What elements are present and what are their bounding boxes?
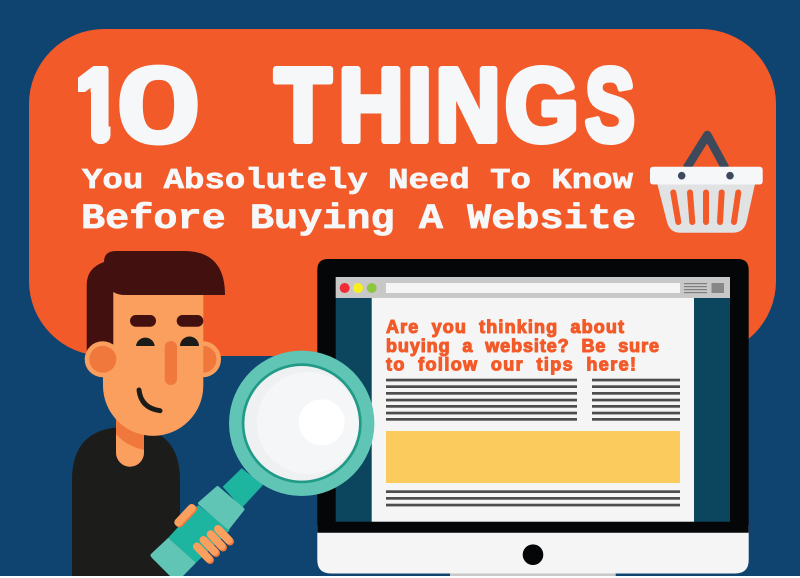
left ear bbox=[85, 341, 121, 377]
title: 10 THINGS: G bbox=[505, 47, 579, 162]
yellow banner bbox=[386, 431, 680, 483]
hand: thumb bbox=[178, 508, 193, 524]
lens ring bbox=[229, 351, 374, 496]
monitor stand base bbox=[450, 570, 616, 576]
nose bbox=[165, 341, 177, 385]
title: 10 THINGS bbox=[78, 64, 634, 146]
hair bbox=[87, 251, 225, 352]
icon: shopping basket bbox=[650, 135, 763, 233]
page headline: Are you thinking about bbox=[386, 317, 624, 337]
title: 10 THINGS: 1 bbox=[73, 48, 122, 163]
eyebrows bbox=[130, 315, 203, 327]
subtitle line one: You Absolutely Need To Know bbox=[82, 164, 634, 197]
hand: fingers bbox=[197, 529, 230, 560]
title: 10 THINGS: N bbox=[436, 49, 500, 163]
right ear bbox=[185, 341, 221, 377]
handle stem bbox=[223, 468, 263, 508]
title: 10 THINGS: H bbox=[339, 49, 403, 163]
magnifying glass bbox=[150, 351, 374, 576]
grip middle bbox=[168, 505, 230, 563]
monitor chin bbox=[317, 525, 749, 574]
face bbox=[103, 285, 203, 436]
page headline bbox=[386, 317, 659, 374]
text lines bottom bbox=[386, 490, 680, 506]
title: 10 THINGS: S bbox=[585, 49, 635, 163]
eyes bbox=[136, 336, 199, 346]
person bbox=[72, 251, 225, 576]
body bbox=[72, 427, 180, 576]
grip top bbox=[200, 488, 243, 528]
monitor bezel bbox=[317, 259, 749, 533]
monitor bbox=[317, 259, 749, 576]
title: 10 THINGS: T bbox=[275, 48, 331, 163]
page headline: to follow our tips here! bbox=[386, 354, 636, 374]
page headline: buying a website? Be sure bbox=[386, 336, 659, 356]
browser bar bbox=[336, 277, 730, 298]
title: 10 THINGS: I bbox=[407, 48, 432, 163]
title: 10 THINGS: 0 bbox=[119, 48, 198, 163]
text lines right column bbox=[592, 379, 680, 421]
text lines left column bbox=[386, 379, 577, 421]
web page bbox=[372, 298, 694, 522]
panel: orange title background bbox=[29, 29, 776, 356]
subtitle line two: Before Buying A Website bbox=[81, 199, 636, 239]
neck shadow bbox=[116, 410, 144, 450]
webcam dot bbox=[523, 544, 543, 565]
neck bbox=[116, 410, 144, 467]
grip bottom bbox=[150, 538, 196, 576]
screen bbox=[336, 277, 730, 522]
smile bbox=[139, 390, 160, 411]
